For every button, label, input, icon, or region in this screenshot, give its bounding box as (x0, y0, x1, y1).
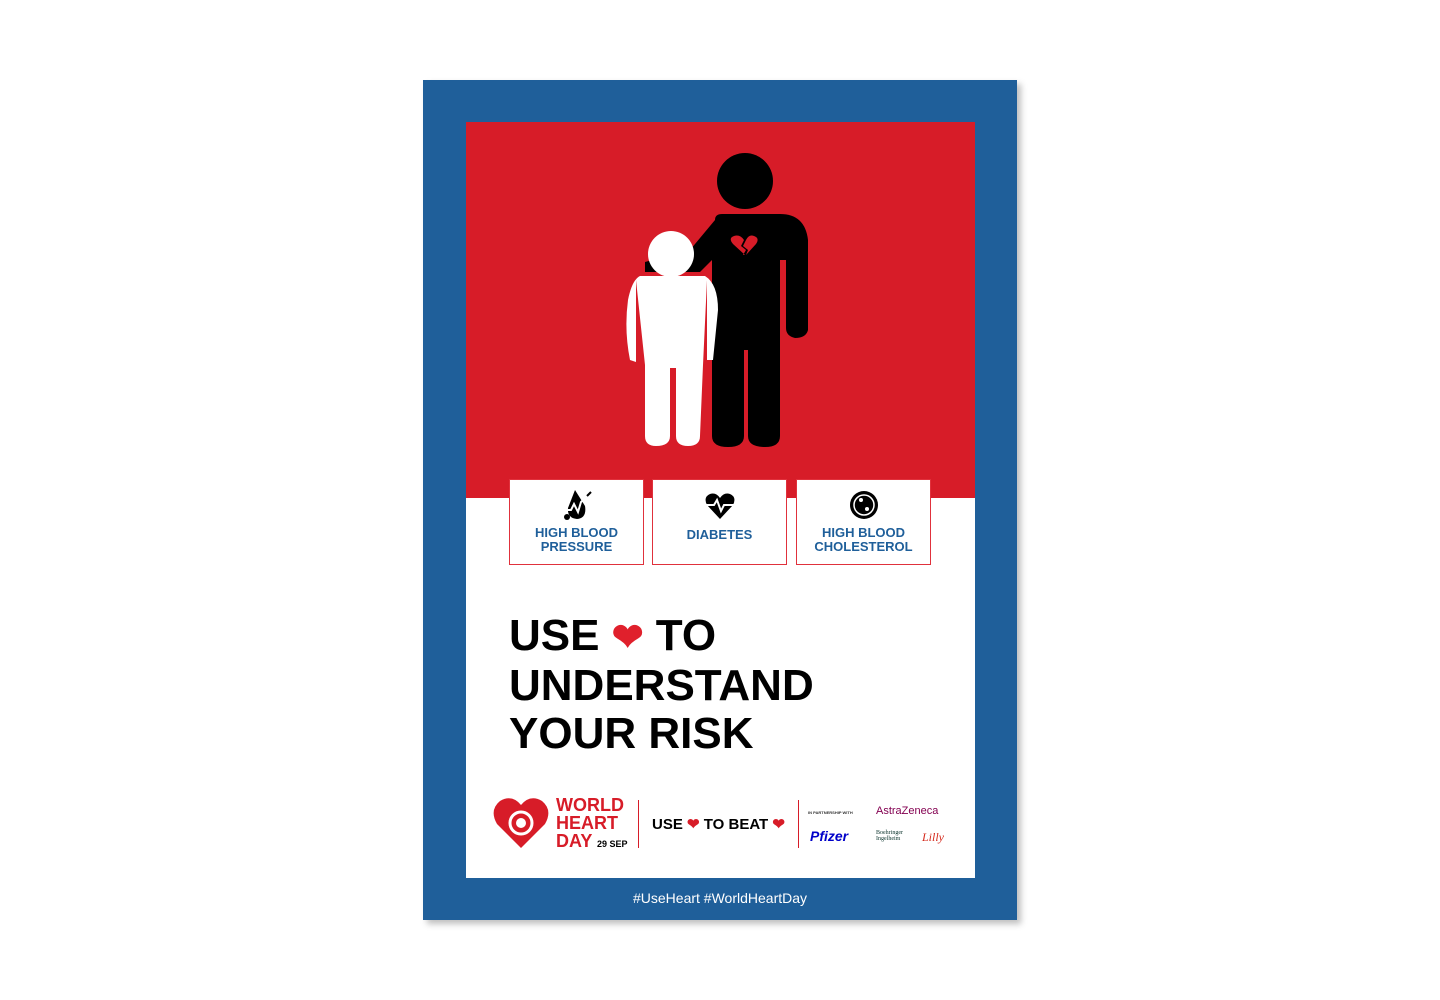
partner logos: Lilly (922, 830, 944, 844)
divider (638, 800, 639, 848)
logo: world heart day: DAY 29 SEP (556, 831, 628, 851)
headline: YOUR RISK (509, 709, 753, 758)
hashtags: #UseHeart #WorldHeartDay (633, 890, 807, 906)
partner logos: Pfizer (810, 828, 848, 844)
red hero panel (466, 122, 975, 498)
logo: world heart day: WORLD (556, 795, 624, 815)
child (626, 231, 718, 446)
partner logos (808, 805, 944, 844)
box: diabetes: DIABETES (687, 527, 752, 542)
box: cholesterol: CHOLESTEROL (814, 539, 913, 554)
box: cholesterol: HIGH BLOOD (822, 525, 905, 540)
partner logos: IN PARTNERSHIP WITH (808, 810, 853, 815)
slogan: USE ❤ TO BEAT ❤ (652, 816, 785, 833)
headline (509, 611, 814, 758)
poster frame (423, 80, 1017, 920)
box: cholesterol (796, 479, 931, 565)
logo: world heart day: HEART (556, 813, 618, 833)
partner logos: Ingelheim (876, 836, 900, 842)
broken heart (731, 236, 758, 255)
box: high blood pressure: PRESSURE (541, 539, 612, 554)
box: high blood pressure: HIGH BLOOD (535, 525, 618, 540)
partner logos: Boehringer (876, 830, 903, 836)
partner logos: AstraZeneca (876, 805, 938, 817)
adult (645, 153, 808, 447)
headline: UNDERSTAND (509, 661, 814, 710)
box: high blood pressure (509, 479, 644, 565)
inner panel (466, 122, 975, 878)
illustration: adult and child (626, 153, 808, 447)
logo: world heart day (494, 795, 628, 851)
box: diabetes (652, 479, 787, 565)
headline: USE ❤ TO (509, 611, 716, 660)
